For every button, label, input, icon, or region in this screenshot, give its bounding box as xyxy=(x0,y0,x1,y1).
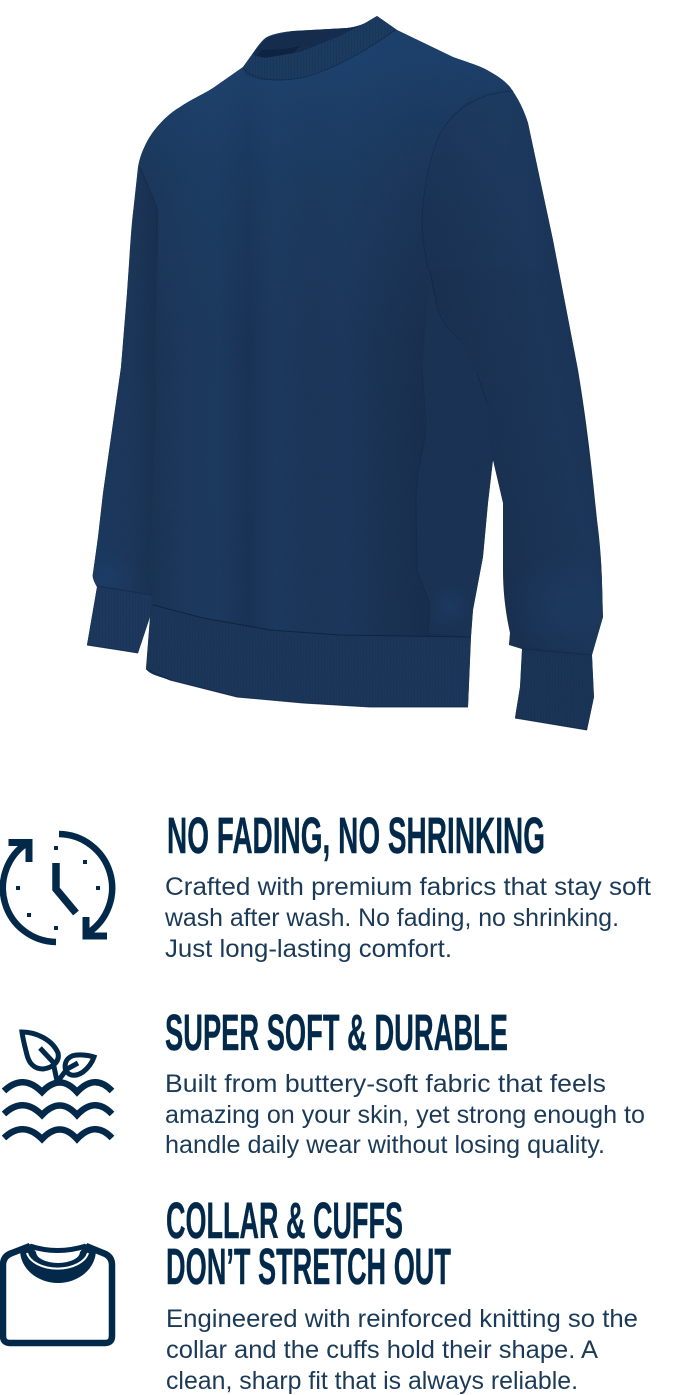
body text: amazing on your skin, yet strong enough to xyxy=(165,1101,645,1129)
icon: clock with rotating arrows xyxy=(3,834,112,942)
icon: sprout over waves xyxy=(4,1032,112,1139)
hem band xyxy=(146,618,471,707)
body text: Crafted with premium fabrics that stay soft xyxy=(165,873,651,901)
torso xyxy=(80,10,610,735)
collar band xyxy=(243,16,397,80)
body text: Built from buttery-soft fabric that feels xyxy=(165,1070,606,1098)
heading xyxy=(166,1192,451,1295)
left sleeve xyxy=(93,189,158,573)
feature 3: collar and cuffs xyxy=(3,1192,638,1395)
body text: Engineered with reinforced knitting so the xyxy=(166,1305,638,1333)
icon: folded shirt xyxy=(3,1244,112,1343)
right sleeve xyxy=(422,87,603,655)
body text: Just long-lasting comfort. xyxy=(165,935,452,963)
heading: COLLAR & CUFFS xyxy=(166,1192,403,1249)
feature 2: super soft xyxy=(4,1004,645,1159)
feature 1: no fading xyxy=(3,807,651,963)
sweatshirt xyxy=(80,10,610,735)
body text: wash after wash. No fading, no shrinking. xyxy=(164,904,619,932)
body text: collar and the cuffs hold their shape. A xyxy=(166,1336,598,1364)
body text xyxy=(165,1070,645,1159)
grain xyxy=(80,10,610,735)
body text: handle daily wear without losing quality. xyxy=(165,1131,605,1159)
side panel xyxy=(471,460,493,636)
collar interior xyxy=(253,16,377,59)
body text xyxy=(166,1305,638,1395)
body text: clean, sharp fit that is always reliable. xyxy=(166,1367,578,1395)
seams xyxy=(87,30,592,730)
heading: DON’T STRETCH OUT xyxy=(166,1238,451,1295)
body text xyxy=(164,873,651,963)
left cuff xyxy=(85,586,152,656)
right cuff xyxy=(513,649,594,733)
